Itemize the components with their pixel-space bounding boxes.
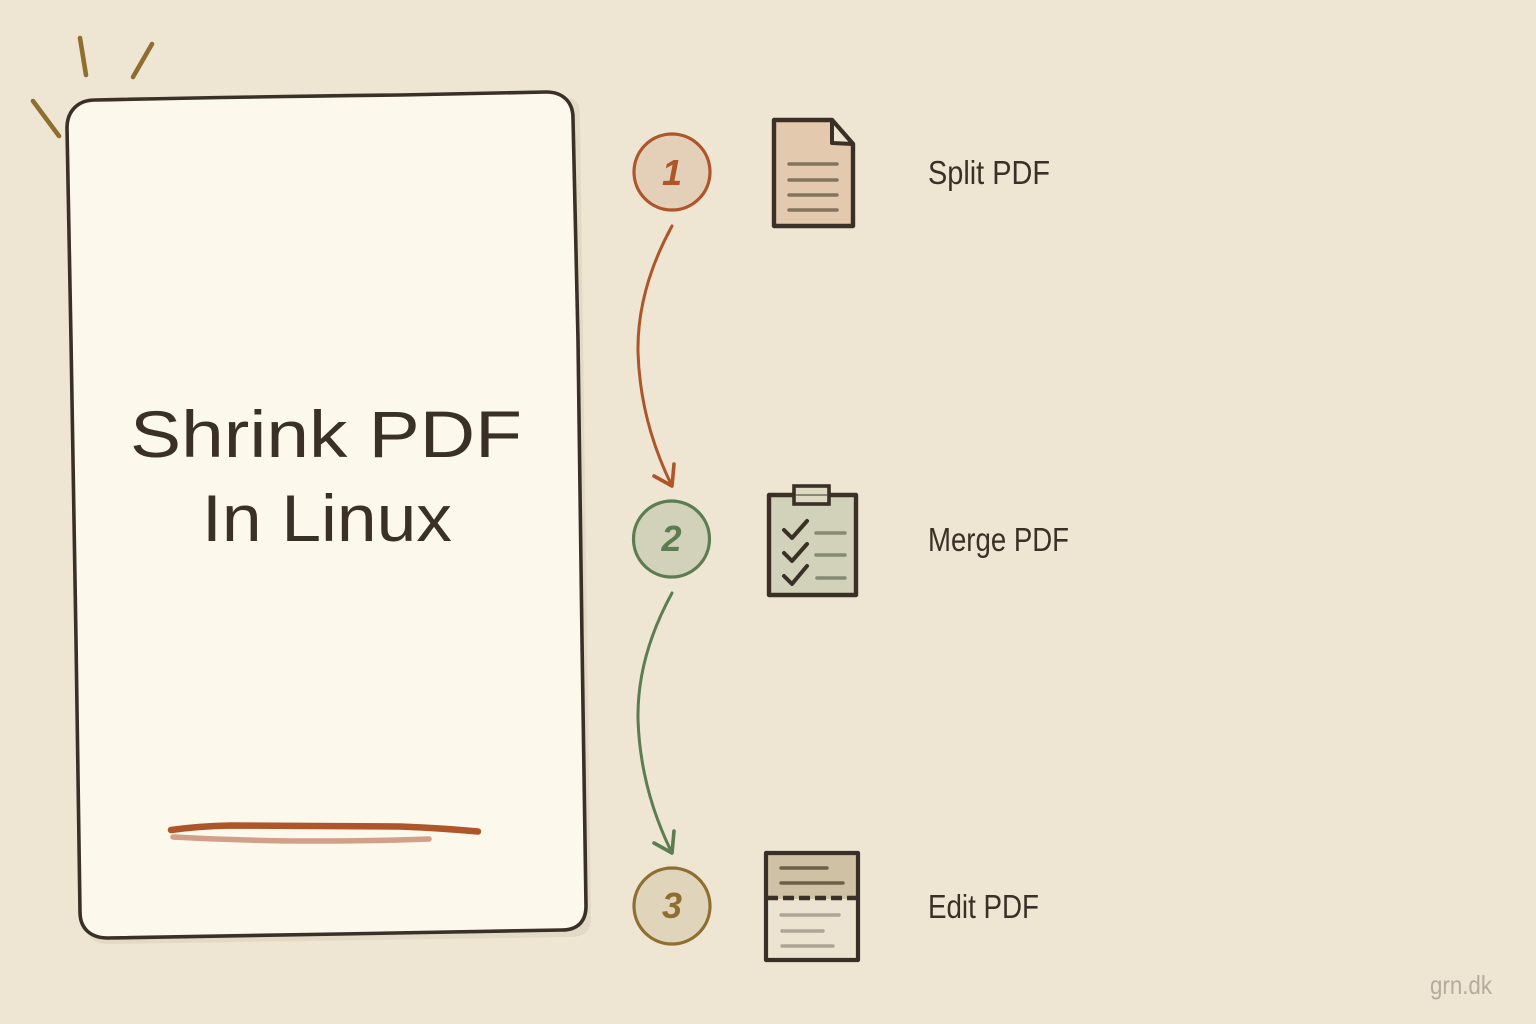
label: Edit PDF: Edit PDF — [928, 888, 1039, 925]
label: Merge PDF: Merge PDF — [928, 521, 1069, 558]
arrow: step 1 to step 2 — [638, 226, 674, 486]
label: Split PDF: Split PDF — [928, 154, 1050, 191]
step 3 number: 3 — [662, 885, 682, 926]
arrow: step 2 to step 3 — [638, 593, 674, 853]
icon: split sheet — [766, 853, 858, 960]
step 1 number — [634, 134, 710, 210]
step 2 number — [634, 501, 710, 577]
step 1 number: 1 — [662, 152, 682, 193]
watermark: grn.dk — [1430, 970, 1493, 1000]
icon: document — [774, 120, 853, 226]
title — [130, 397, 522, 555]
title: Shrink PDF — [130, 397, 522, 471]
panel: title card — [67, 92, 591, 944]
decorative sparks — [33, 38, 152, 136]
title underline — [171, 826, 478, 841]
icon: clipboard checklist — [769, 486, 856, 595]
title: In Linux — [202, 481, 452, 555]
step 3 number — [634, 868, 710, 944]
step 2 number: 2 — [660, 518, 682, 559]
